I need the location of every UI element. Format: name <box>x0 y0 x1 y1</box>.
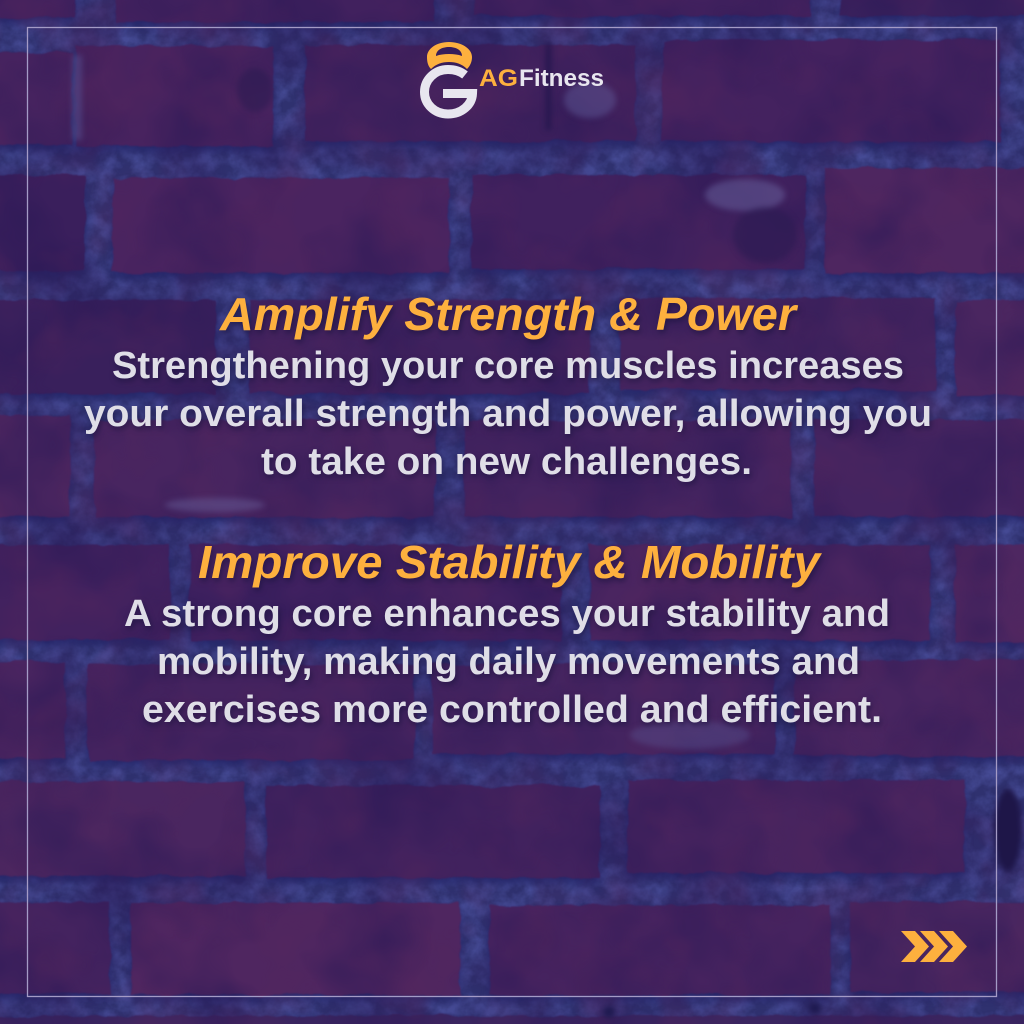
body text: mobility, making daily movements and <box>157 641 860 683</box>
icon: next arrows <box>901 931 967 962</box>
icon: letter G <box>424 70 472 114</box>
body text: A strong core enhances your stability and <box>124 593 890 635</box>
text block: Improve Stability & Mobility <box>124 536 890 731</box>
body text <box>124 593 890 731</box>
logo: AG Fitness <box>424 42 604 114</box>
body text: exercises more controlled and efficient. <box>142 689 882 731</box>
heading: Amplify Strength & Power <box>219 288 798 340</box>
icon: kettlebell handle <box>427 42 472 69</box>
body text: your overall strength and power, allowing you <box>84 393 932 435</box>
body text <box>84 345 932 483</box>
logo wordmark: Fitness <box>519 65 604 92</box>
logo wordmark <box>479 65 604 92</box>
body text: to take on new challenges. <box>261 441 752 483</box>
text block: Amplify Strength & Power <box>84 288 932 483</box>
body text: Strengthening your core muscles increases <box>112 345 904 387</box>
heading: Improve Stability & Mobility <box>198 536 822 588</box>
logo wordmark: AG <box>479 65 518 92</box>
